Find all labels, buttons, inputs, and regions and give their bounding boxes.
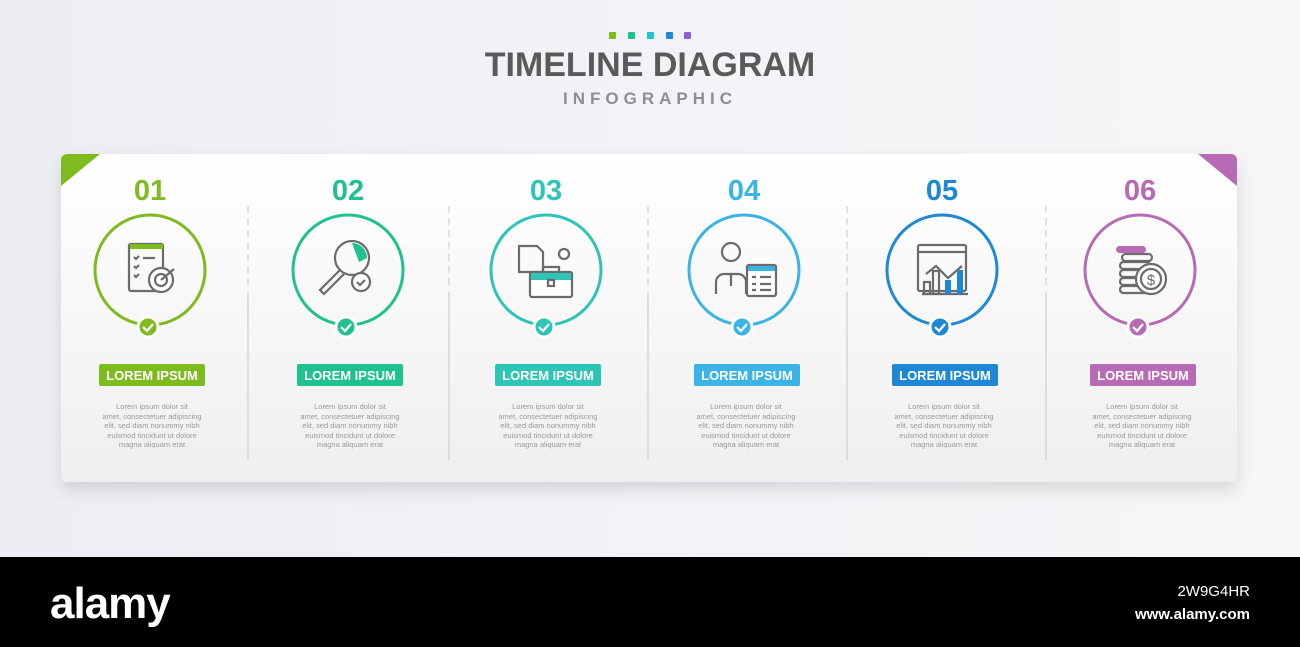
icon: chart browser [918, 245, 968, 294]
step 05: LOREM IPSUM [899, 368, 991, 383]
step 02: amet, consectetuer adipiscing [300, 412, 400, 421]
step 05: amet, consectetuer adipiscing [894, 412, 994, 421]
step 04: Lorem ipsum dolor sit [710, 402, 783, 411]
footer bar: alamy [50, 579, 171, 628]
step 04: LOREM IPSUM [701, 368, 793, 383]
step 05 [887, 175, 998, 449]
step 04: amet, consectetuer adipiscing [696, 412, 796, 421]
step 01: 01 [134, 175, 166, 207]
step 03: elit, sed diam nonummy nibh [500, 421, 596, 430]
step 02: Lorem ipsum dolor sit [314, 402, 387, 411]
footer bar: 2W9G4HR [1177, 583, 1250, 600]
step 06: amet, consectetuer adipiscing [1092, 412, 1192, 421]
step 05: 05 [926, 175, 958, 207]
step 02 [293, 175, 403, 449]
step 01: magna aliquam erat [119, 440, 186, 449]
icon: coins [1116, 246, 1166, 294]
step 04: elit, sed diam nonummy nibh [698, 421, 794, 430]
step 06: euismod tincidunt ut dolore [1097, 431, 1187, 440]
step 06: $ [1147, 272, 1156, 289]
step 03: amet, consectetuer adipiscing [498, 412, 598, 421]
step 01: LOREM IPSUM [106, 368, 198, 383]
step 05: Lorem ipsum dolor sit [908, 402, 981, 411]
title: TIMELINE DIAGRAM [485, 46, 815, 84]
step 04: 04 [728, 175, 760, 207]
step 06 [1085, 175, 1196, 449]
step 06: Lorem ipsum dolor sit [1106, 402, 1179, 411]
step 04 [689, 175, 800, 449]
step 01: euismod tincidunt ut dolore [107, 431, 197, 440]
panel: card [61, 154, 1237, 482]
step 01: Lorem ipsum dolor sit [116, 402, 189, 411]
footer bar [0, 557, 1300, 647]
step 03: euismod tincidunt ut dolore [503, 431, 593, 440]
step 03: Lorem ipsum dolor sit [512, 402, 585, 411]
step 02: 02 [332, 175, 364, 207]
step 05: elit, sed diam nonummy nibh [896, 421, 992, 430]
step 01 [95, 175, 205, 449]
subtitle: INFOGRAPHIC [563, 89, 737, 108]
icon: checklist target [129, 244, 174, 292]
step 02: elit, sed diam nonummy nibh [302, 421, 398, 430]
step 05: magna aliquam erat [911, 440, 978, 449]
step 02: magna aliquam erat [317, 440, 384, 449]
step 03 [491, 175, 601, 449]
step 06: LOREM IPSUM [1097, 368, 1189, 383]
step 06: magna aliquam erat [1109, 440, 1176, 449]
step 02: LOREM IPSUM [304, 368, 396, 383]
icon: person list [716, 243, 776, 296]
step 03: 03 [530, 175, 562, 207]
step 04: magna aliquam erat [713, 440, 780, 449]
title dots [609, 32, 691, 39]
step 01: amet, consectetuer adipiscing [102, 412, 202, 421]
step 02: euismod tincidunt ut dolore [305, 431, 395, 440]
icon: briefcase document [519, 246, 572, 297]
step 05: euismod tincidunt ut dolore [899, 431, 989, 440]
icon: magnifier [320, 241, 370, 294]
step 01: elit, sed diam nonummy nibh [104, 421, 200, 430]
step 06: elit, sed diam nonummy nibh [1094, 421, 1190, 430]
footer bar: www.alamy.com [1134, 606, 1250, 623]
step 03: LOREM IPSUM [502, 368, 594, 383]
step 03: magna aliquam erat [515, 440, 582, 449]
step 04: euismod tincidunt ut dolore [701, 431, 791, 440]
step 06: 06 [1124, 175, 1156, 207]
